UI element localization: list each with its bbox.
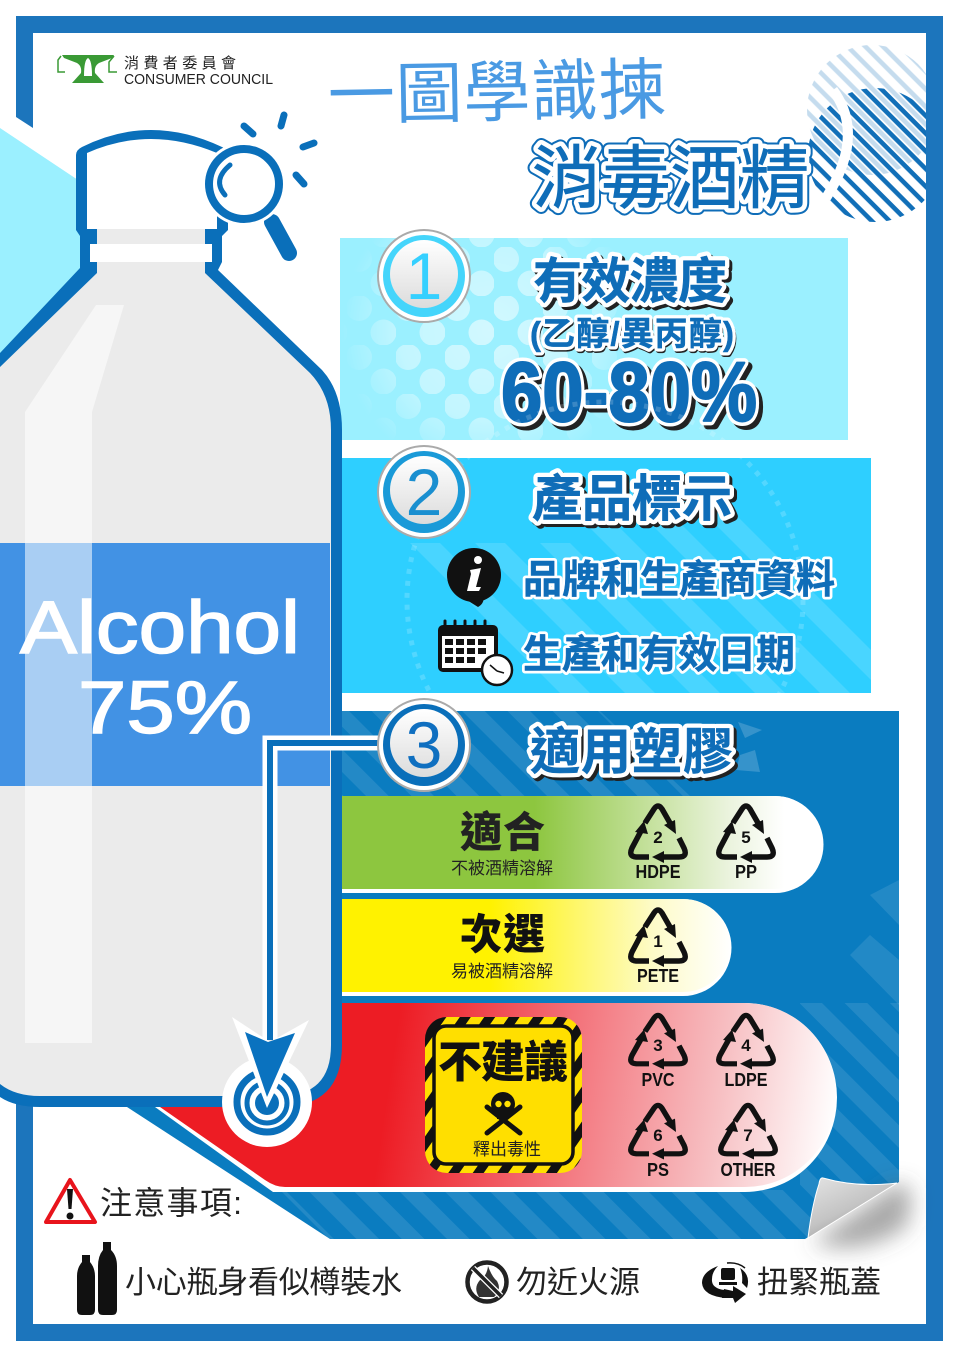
text: brand and manufacturer details: 品牌和生產商資料 xyxy=(523,559,835,602)
icon: recycling 3 PVC: PVC xyxy=(642,1070,674,1090)
band: not recommended xyxy=(155,1003,837,1192)
icon: no fire xyxy=(468,1262,506,1302)
value: 60-80%: 60-80% xyxy=(501,345,757,439)
title line 2: 消毒酒精 xyxy=(532,140,809,217)
target with arrowhead xyxy=(222,1017,312,1147)
panel 2: product labelling xyxy=(340,402,871,798)
band: second choice xyxy=(342,899,732,996)
page curl xyxy=(808,1178,912,1248)
icon: green scales xyxy=(58,55,117,83)
label: not recommended: 不建議 xyxy=(438,1038,568,1087)
number badge 2: 2 xyxy=(406,455,442,529)
number badge 2 xyxy=(378,446,470,538)
icon: recycling 6 PS: 6 xyxy=(653,1126,663,1145)
caption: releases toxins: 釋出毒性 xyxy=(473,1140,541,1159)
text: production and expiry date: 生產和有效日期 xyxy=(523,634,795,677)
heading: effective concentration: 有效濃度 xyxy=(536,258,730,312)
icon: recycling 6 PS: PS xyxy=(647,1160,669,1180)
heading: product labelling: 產品標示 xyxy=(535,474,735,530)
text: keep away from fire: 勿近火源 xyxy=(516,1265,640,1300)
caption: not dissolved by alcohol: 不被酒精溶解 xyxy=(451,859,553,878)
icon: recycling 5 PP xyxy=(719,806,773,882)
icon: recycling 2 HDPE: HDPE xyxy=(636,862,680,882)
panel 1: effective concentration xyxy=(340,238,848,443)
heading: product labelling: 產品標示 xyxy=(532,471,732,527)
heading: suitable plastics: 適用塑膠 xyxy=(530,724,733,780)
text: tighten bottle cap: 扭緊瓶蓋 xyxy=(757,1265,881,1300)
bottle highlight xyxy=(25,305,124,1043)
bottle xyxy=(0,130,342,1107)
text: council name Chinese: 消費者委員會 xyxy=(124,55,240,72)
warning sign: not recommended xyxy=(425,1017,582,1173)
heading: suitable plastics: 適用塑膠 xyxy=(530,724,733,780)
heading: effective concentration: 有效濃度 xyxy=(533,255,727,309)
heading: effective concentration: 有效濃度 xyxy=(533,255,727,309)
text: 75%: 75% xyxy=(78,666,252,749)
icon: recycling 3 PVC: 3 xyxy=(653,1036,663,1055)
subheading: ethanol / isopropanol: (乙醇/異丙醇) xyxy=(530,315,734,352)
icon: recycling 4 LDPE: LDPE xyxy=(724,1070,768,1090)
magnifying glass xyxy=(202,115,314,253)
number badge 3 xyxy=(378,699,470,791)
decorative striped circles xyxy=(807,45,926,222)
value: 60-80%: 60-80% xyxy=(505,349,761,443)
icon: recycling 7 OTHER: 7 xyxy=(743,1126,753,1145)
text: Alcohol: Alcohol xyxy=(20,586,300,669)
text: council name English: CONSUMER COUNCIL xyxy=(124,72,273,88)
cyan background wedge xyxy=(0,128,90,380)
icon: recycling 3 PVC xyxy=(631,1015,685,1090)
icon: recycling 7 OTHER xyxy=(720,1105,776,1180)
text: brand and manufacturer details: 品牌和生產商資料 xyxy=(523,559,835,602)
label: alcohol band xyxy=(0,543,330,786)
icon: recycling 2 HDPE: 2 xyxy=(653,828,663,847)
notes section xyxy=(46,1180,881,1315)
subheading: ethanol / isopropanol: (乙醇/異丙醇) xyxy=(531,317,735,354)
icon: tighten cap xyxy=(702,1263,748,1303)
text: bottle looks like bottled water: 小心瓶身看似樽裝水 xyxy=(125,1265,402,1300)
icon: recycling 4 LDPE xyxy=(719,1015,773,1090)
icon: recycling 5 PP: 5 xyxy=(741,828,751,847)
neck band xyxy=(90,244,212,262)
panel 3: suitable plastics xyxy=(127,711,912,1248)
icon: calendar and clock xyxy=(438,621,512,685)
label: second choice: 次選 xyxy=(460,911,545,958)
icon: two bottles xyxy=(77,1242,117,1315)
title line 1: 一圖學識揀 xyxy=(327,53,667,134)
caption: easily dissolved by alcohol: 易被酒精溶解 xyxy=(451,962,553,981)
icon: recycling 4 LDPE: 4 xyxy=(741,1036,751,1055)
icon: recycling 2 HDPE xyxy=(631,806,685,882)
number badge 1: 1 xyxy=(406,239,442,313)
subheading: ethanol / isopropanol: (乙醇/異丙醇) xyxy=(530,315,734,352)
icon: recycling 1 PETE: 1 xyxy=(653,932,663,951)
icon: recycling 1 PETE xyxy=(631,910,685,986)
icon: skull and crossbones xyxy=(487,1092,520,1133)
heading: suitable plastics: 適用塑膠 xyxy=(533,727,736,783)
icon: information bubble xyxy=(447,548,501,607)
text: production and expiry date: 生產和有效日期 xyxy=(523,634,795,677)
title line 2: 消毒酒精 xyxy=(532,140,809,217)
icon: recycling 5 PP: PP xyxy=(735,862,757,882)
icon: recycling 6 PS xyxy=(631,1105,685,1180)
heading: product labelling: 產品標示 xyxy=(532,471,732,527)
number badge 1 xyxy=(378,230,470,322)
value: 60-80%: 60-80% xyxy=(501,345,757,439)
title line 2: 消毒酒精 xyxy=(532,140,809,217)
label: suitable: 適合 xyxy=(460,809,545,856)
connector arrow from badge 3 to target xyxy=(270,743,385,1040)
icon: recycling 7 OTHER: OTHER xyxy=(720,1160,776,1180)
number badge 3: 3 xyxy=(406,708,442,782)
logo: Consumer Council xyxy=(58,55,273,88)
band: suitable xyxy=(342,796,824,893)
icon: recycling 1 PETE: PETE xyxy=(637,966,679,986)
icon: warning triangle xyxy=(46,1180,95,1222)
heading: notes: 注意事項: xyxy=(100,1185,242,1221)
